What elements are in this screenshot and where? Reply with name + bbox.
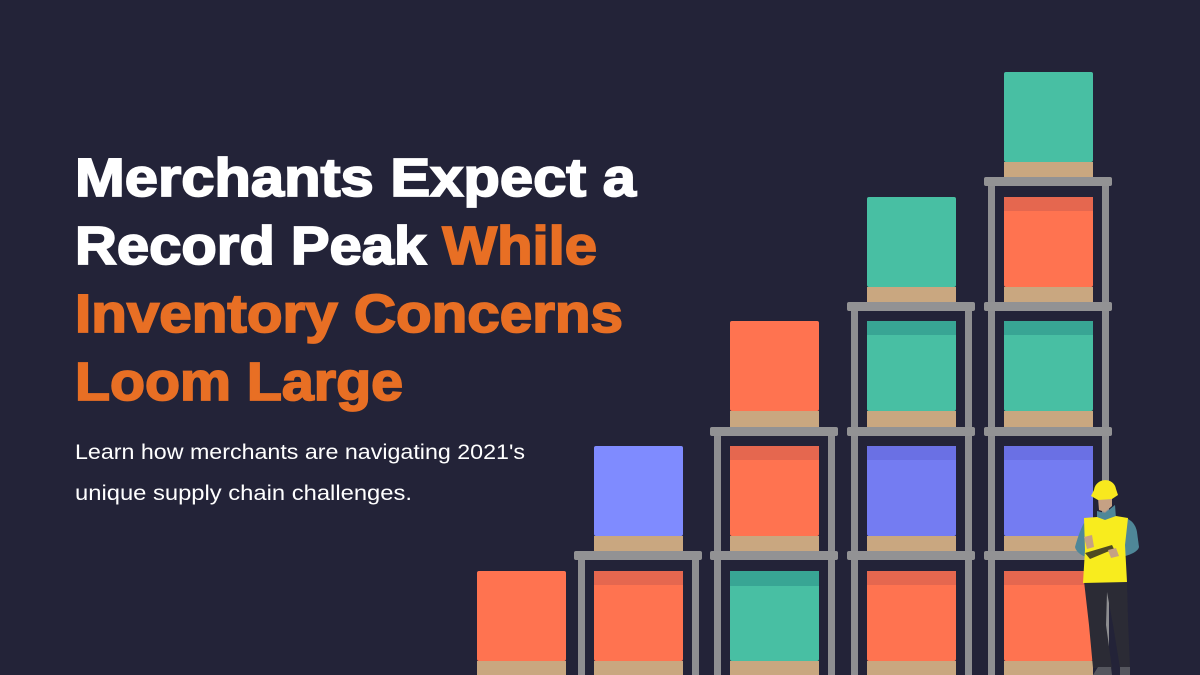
title: Loom Large <box>75 352 403 412</box>
shelving frames <box>574 177 1112 675</box>
column 1 boxes <box>477 571 566 675</box>
worker vest <box>1083 516 1128 583</box>
worker face <box>1098 498 1112 512</box>
worker boots <box>1093 667 1130 675</box>
title: Inventory Concerns <box>75 284 623 344</box>
subtitle text: unique supply chain challenges. <box>75 481 412 505</box>
subtitle text: Learn how merchants are navigating 2021's <box>75 440 525 464</box>
worker right arm <box>1118 518 1139 557</box>
worker neck and collar <box>1097 505 1116 521</box>
title <box>75 148 637 412</box>
worker arms <box>1075 523 1092 557</box>
worker clipboard <box>1085 545 1114 559</box>
icon: warehouse worker <box>1075 480 1139 675</box>
column 4 boxes <box>867 197 956 675</box>
title: Merchants Expect a <box>75 148 637 208</box>
subtitle text <box>75 440 525 505</box>
column 2 boxes <box>594 446 683 675</box>
worker hard hat <box>1091 480 1118 500</box>
worker legs <box>1084 581 1130 668</box>
column 5 boxes <box>1004 72 1093 675</box>
title: Record Peak While <box>75 216 597 276</box>
worker hands <box>1084 535 1119 558</box>
column 3 boxes <box>730 321 819 675</box>
